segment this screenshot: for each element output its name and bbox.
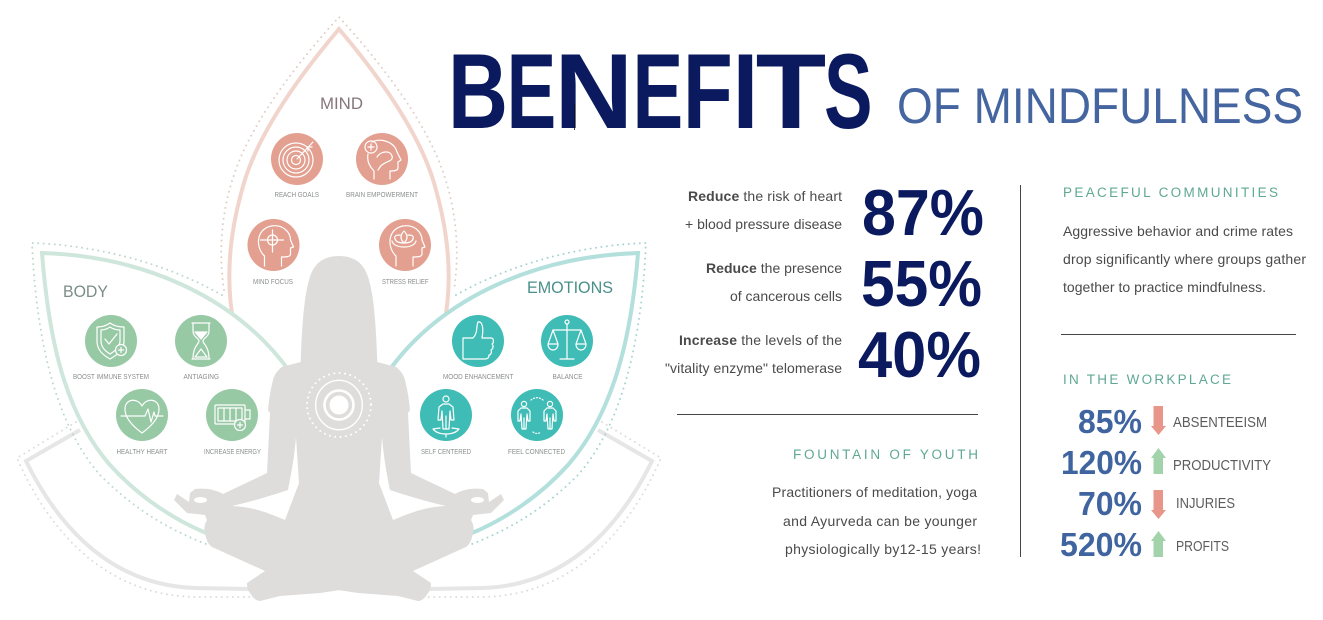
row: productivity: PRODUCTIVITY bbox=[1173, 457, 1271, 474]
heading: body: BODY bbox=[63, 282, 108, 301]
label: boost immune system: BOOST IMMUNE SYSTEM bbox=[73, 374, 149, 381]
stat: telomerase 40% bbox=[665, 318, 981, 391]
label: brain empowerment: BRAIN EMPOWERMENT bbox=[346, 192, 419, 199]
label: healthy heart: HEALTHY HEART bbox=[116, 449, 168, 456]
row: injuries: INJURIES bbox=[1176, 495, 1235, 512]
title: E bbox=[632, 31, 683, 151]
section: peaceful communities: together to practice mindfulness. bbox=[1063, 279, 1266, 295]
icon: feel connected bbox=[511, 389, 563, 441]
section: peaceful communities: drop significantly where groups gather bbox=[1063, 251, 1306, 267]
stat: heart disease 87%: + blood pressure disease bbox=[685, 216, 842, 232]
stat: heart disease 87%: 87% bbox=[862, 176, 984, 249]
section: in the workplace: IN THE WORKPLACE bbox=[1063, 372, 1231, 387]
section: peaceful communities: Aggressive behavior and crime rates bbox=[1063, 223, 1293, 239]
label: reach goals: REACH GOALS bbox=[274, 192, 319, 199]
section: fountain of youth: FOUNTAIN OF YOUTH bbox=[793, 447, 978, 462]
lotus illustration bbox=[17, 17, 661, 601]
heading: mind: MIND bbox=[320, 94, 363, 113]
row: injuries: 70% bbox=[1078, 485, 1142, 522]
stat: telomerase 40%: 40% bbox=[858, 318, 981, 391]
stat: heart disease 87%: Reduce the risk of heart bbox=[688, 188, 842, 204]
stat: cancerous cells 55% bbox=[706, 247, 982, 320]
row: absenteeism: 85% bbox=[1078, 403, 1142, 440]
title: B bbox=[448, 31, 508, 151]
label: antiaging: ANTIAGING bbox=[184, 374, 219, 381]
row: productivity bbox=[1061, 444, 1271, 481]
title: T bbox=[756, 31, 826, 151]
title: F bbox=[683, 31, 733, 151]
row: absenteeism: ABSENTEEISM bbox=[1173, 414, 1267, 431]
heading: emotions: EMOTIONS bbox=[527, 278, 613, 297]
label: mood enhancement: MOOD ENHANCEMENT bbox=[443, 374, 514, 381]
icon: brain empowerment bbox=[356, 133, 408, 185]
icon: mind focus bbox=[248, 219, 300, 271]
label: feel connected: FEEL CONNECTED bbox=[508, 449, 565, 456]
label: stress relief: STRESS RELIEF bbox=[382, 279, 428, 286]
section: peaceful communities bbox=[1063, 185, 1306, 295]
label: balance: BALANCE bbox=[552, 374, 583, 381]
petal: emotions bbox=[388, 243, 646, 544]
icon: healthy heart bbox=[116, 389, 168, 441]
section: fountain of youth: and Ayurveda can be younger bbox=[783, 513, 977, 529]
icon: stress relief bbox=[379, 219, 431, 271]
icon: antiaging hourglass bbox=[175, 315, 227, 367]
title: I bbox=[732, 31, 758, 151]
stat: cancerous cells 55%: Reduce the presence bbox=[706, 260, 842, 276]
icon: balance scale bbox=[541, 315, 593, 367]
stat: telomerase 40%: Increase the levels of the bbox=[679, 332, 842, 348]
divider lines bbox=[677, 185, 1296, 557]
stat: heart disease 87% bbox=[685, 176, 984, 249]
label: self centered: SELF CENTERED bbox=[421, 449, 471, 456]
row: profits bbox=[1060, 526, 1229, 563]
stat: cancerous cells 55%: 55% bbox=[861, 247, 982, 320]
petal: bottom grey bbox=[17, 422, 661, 597]
row: profits: PROFITS bbox=[1176, 538, 1229, 555]
title: N bbox=[554, 31, 633, 151]
icon: self centered bbox=[420, 389, 472, 441]
section: fountain of youth bbox=[772, 447, 981, 557]
section: fountain of youth: Practitioners of meditation, yoga bbox=[772, 484, 977, 500]
section: in the workplace bbox=[1060, 372, 1271, 563]
icon: heart chakra rings bbox=[307, 373, 371, 437]
title: S bbox=[824, 31, 872, 151]
section: fountain of youth: physiologically by12-15 years! bbox=[785, 541, 981, 557]
petal: body bbox=[32, 243, 290, 544]
petal: mind bbox=[221, 17, 457, 325]
title bbox=[448, 31, 1303, 151]
row: injuries bbox=[1078, 485, 1235, 522]
icon: increase energy bbox=[206, 389, 258, 441]
silhouette: meditating figure bbox=[174, 256, 504, 601]
row: profits: 520% bbox=[1060, 526, 1142, 563]
row: absenteeism bbox=[1078, 403, 1267, 440]
stat: telomerase 40%: "vitality enzyme" telomerase bbox=[665, 360, 842, 376]
icon: boost immune system bbox=[85, 315, 137, 367]
label: mind focus: MIND FOCUS bbox=[253, 279, 293, 286]
icon: mood enhancement thumbs up bbox=[452, 315, 504, 367]
section: peaceful communities: PEACEFUL COMMUNITIES bbox=[1063, 185, 1278, 200]
row: productivity: 120% bbox=[1061, 444, 1142, 481]
title: E bbox=[507, 31, 556, 151]
stat: cancerous cells 55%: of cancerous cells bbox=[730, 288, 842, 304]
label: increase energy: INCREASE ENERGY bbox=[204, 449, 261, 456]
icon: reach goals bbox=[271, 133, 323, 185]
